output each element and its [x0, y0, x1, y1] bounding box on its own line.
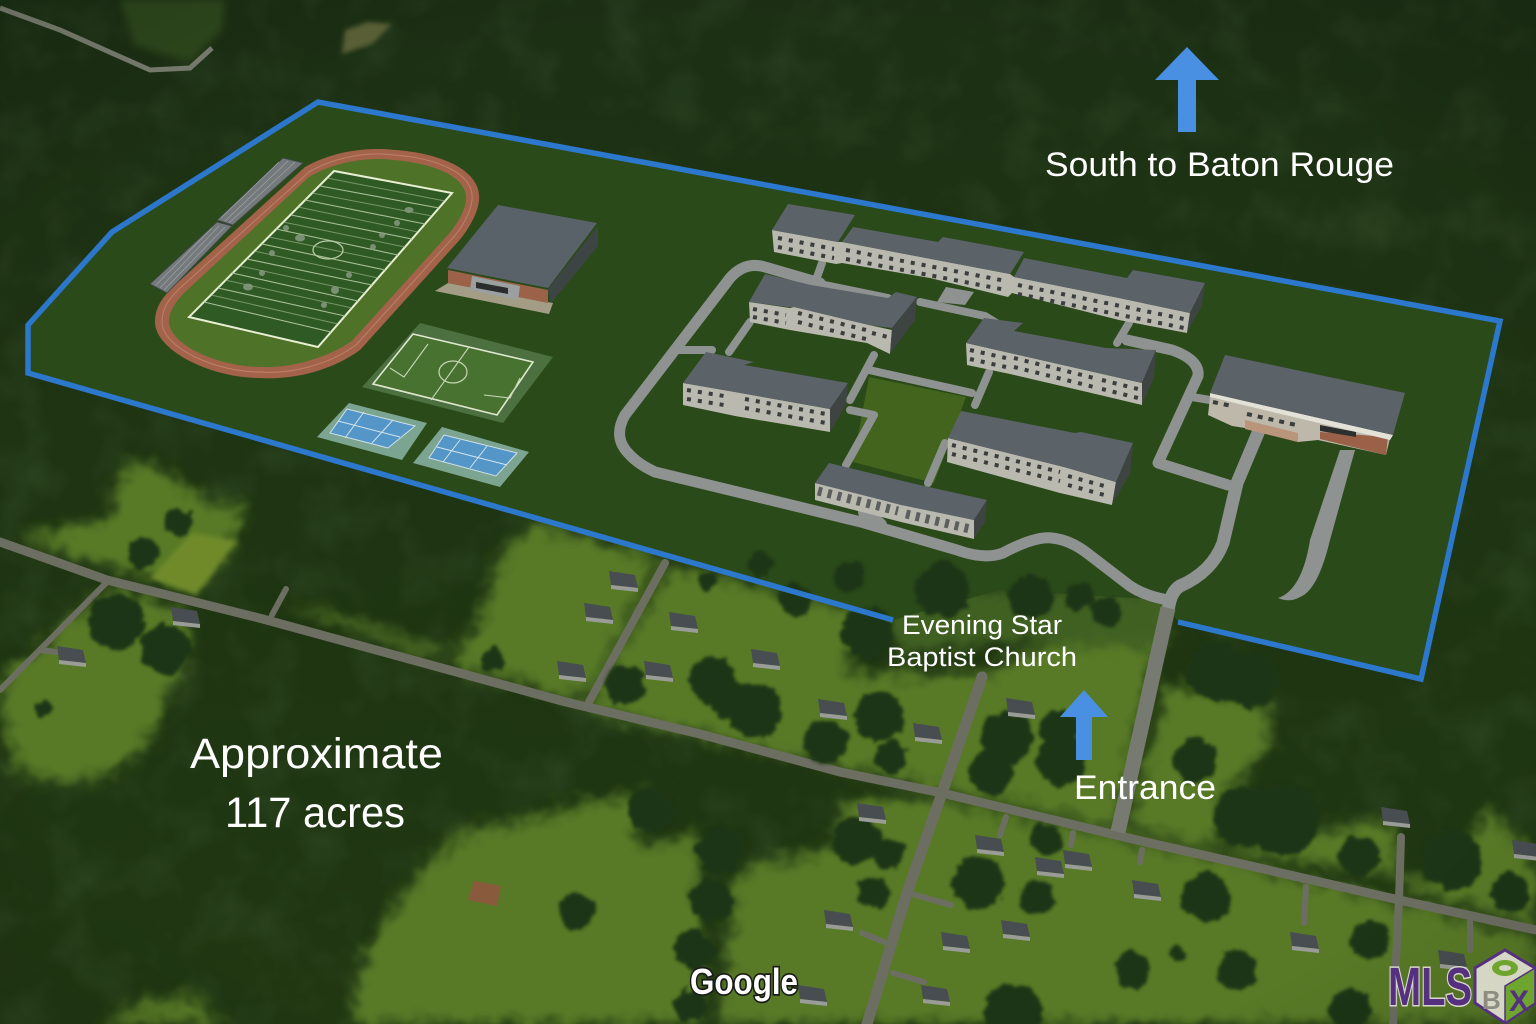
- arrow: north to Baton Rouge: [1155, 47, 1219, 132]
- soccer field: [362, 323, 553, 423]
- label: Approximate 117 acres: [190, 730, 443, 837]
- label: Evening Star Baptist Church: Baptist Church: [887, 642, 1077, 672]
- grass fields outside the site: [0, 462, 1536, 1024]
- campus building: east wing: [966, 318, 1156, 405]
- campus building: east hall: [1208, 355, 1405, 455]
- tree clusters: [37, 508, 1530, 1024]
- campus loop road and walkways: [620, 263, 1355, 612]
- logo: MLS Box: MLS: [1388, 957, 1472, 1017]
- campus building: south wing: [947, 411, 1133, 505]
- tennis courts: [317, 403, 529, 487]
- label: South to Baton Rouge: South to Baton Rouge: [1045, 146, 1394, 184]
- Google watermark: Google: [690, 961, 798, 1002]
- arrow: entrance: [1060, 690, 1108, 760]
- campus building: front hall: [815, 463, 987, 539]
- label: Evening Star Baptist Church: Evening Star: [902, 610, 1062, 640]
- entrance drive: [1118, 608, 1168, 832]
- campus building: southwest wing: [683, 352, 848, 432]
- label: Approximate 117 acres: 117 acres: [225, 789, 405, 837]
- label: Approximate 117 acres: Approximate: [190, 730, 443, 778]
- site boundary line: [28, 102, 1500, 679]
- logo: MLS Box: X: [1509, 985, 1529, 1018]
- label: Entrance: Entrance: [1074, 769, 1216, 807]
- campus building: north wing: [772, 204, 1205, 333]
- top-left clearing and road: [0, 0, 392, 70]
- football field: [189, 171, 452, 347]
- gymnasium building: [435, 205, 598, 314]
- label: Evening Star Baptist Church: [887, 610, 1077, 672]
- campus building: west wing: [749, 274, 917, 354]
- lower neighbourhood roads: [0, 542, 1536, 1024]
- campus central lawn: [853, 377, 966, 483]
- bleachers: [150, 158, 303, 293]
- running track: [155, 149, 479, 378]
- houses: [57, 571, 1536, 1006]
- logo: MLS Box: [1388, 950, 1535, 1023]
- site parcel lawn: [28, 102, 1500, 679]
- logo: MLS Box: B: [1482, 985, 1501, 1015]
